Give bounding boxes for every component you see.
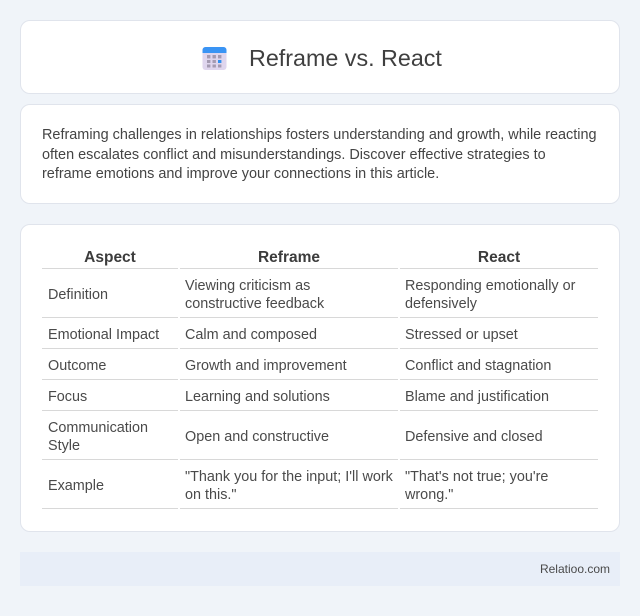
row: Outcome: Outcome (48, 358, 106, 374)
table header: React: React (478, 249, 520, 266)
Example: Reframe: on this." (185, 487, 237, 503)
footer bar (20, 552, 620, 586)
Focus: Reframe: Learning and solutions (185, 389, 330, 405)
intro paragraph (42, 127, 597, 182)
icon: calendar (202, 47, 226, 70)
Emotional Impact: Reframe: Calm and composed (185, 327, 317, 343)
Outcome: Reframe: Growth and improvement (185, 358, 347, 374)
header panel (20, 20, 620, 94)
row: Emotional Impact: Emotional Impact (48, 327, 159, 343)
row: Communication Style (48, 420, 148, 454)
Example: Reframe (185, 469, 393, 503)
Definition: Reframe: Viewing criticism as (185, 278, 310, 294)
footer brand text: Relatioo.com (540, 562, 610, 576)
Definition: Reframe: constructive feedback (185, 296, 324, 312)
Communication Style: React: Defensive and closed (405, 429, 543, 445)
intro paragraph: reframe emotions and improve your connections in this article. (42, 166, 439, 182)
comparison table panel (20, 224, 620, 532)
intro paragraph: often escalates conflict and misunderstandings. Discover effective strategies to (42, 146, 546, 162)
title: Reframe vs. React (249, 45, 442, 71)
table header: Reframe: Reframe (258, 249, 320, 266)
row: Communication Style: Style (48, 438, 80, 454)
row: Definition: Definition (48, 287, 108, 303)
row: Communication Style: Communication (48, 420, 148, 436)
Example: React: "That's not true; you're (405, 469, 548, 485)
Example: React (405, 469, 548, 503)
Definition: React: Responding emotionally or (405, 278, 575, 294)
Example: Reframe: "Thank you for the input; I'll work (185, 469, 393, 485)
Definition: React: defensively (405, 296, 477, 312)
row: Focus: Focus (48, 389, 87, 405)
Definition: React (405, 278, 576, 312)
table header: Aspect: Aspect (84, 249, 136, 266)
Outcome: React: Conflict and stagnation (405, 358, 551, 374)
intro text panel (20, 104, 620, 204)
Emotional Impact: React: Stressed or upset (405, 327, 518, 343)
Communication Style: Reframe: Open and constructive (185, 429, 329, 445)
Definition: Reframe (185, 278, 324, 312)
Focus: React: Blame and justification (405, 389, 549, 405)
Example: React: wrong." (405, 487, 453, 503)
intro paragraph: Reframing challenges in relationships fosters understanding and growth, while reacting (42, 127, 597, 143)
row: Example: Example (48, 478, 104, 494)
